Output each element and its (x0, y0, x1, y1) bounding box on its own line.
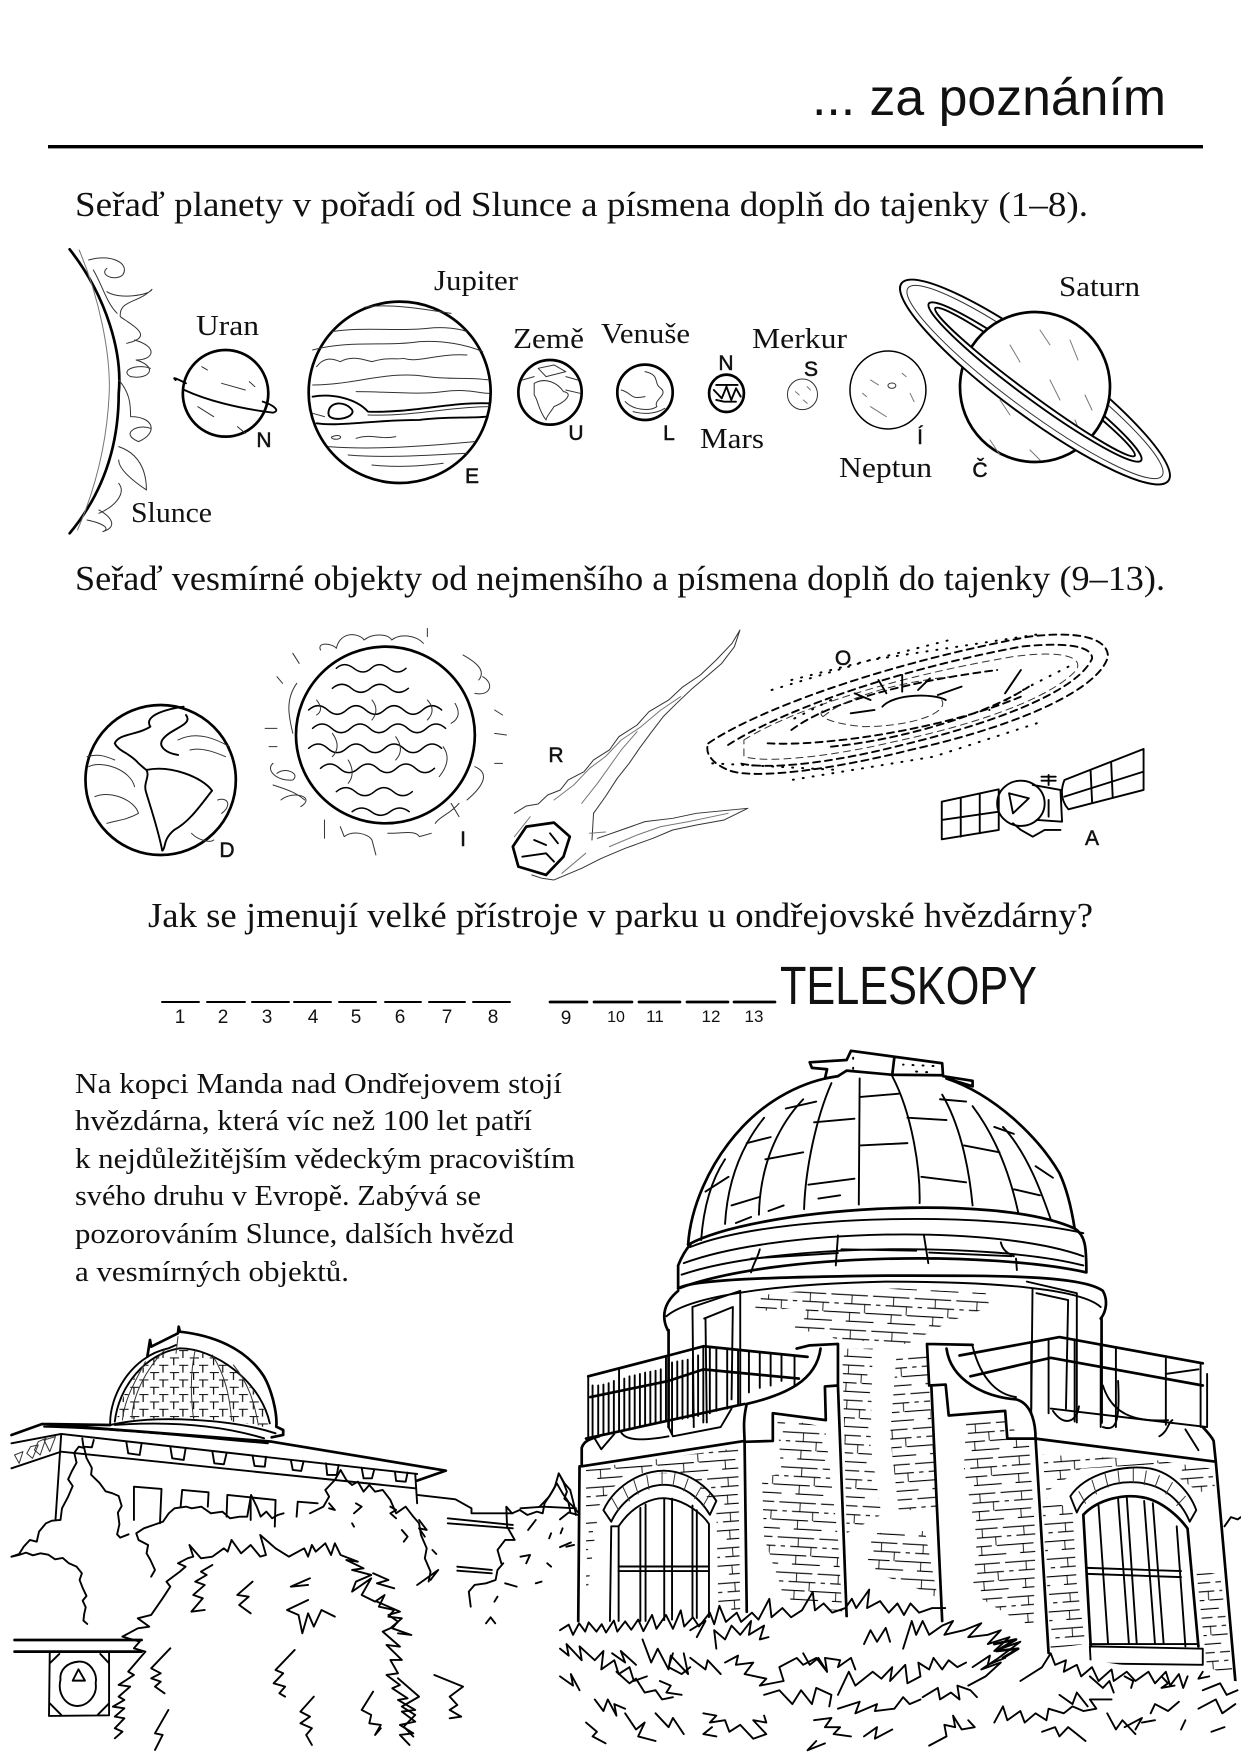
planet: Saturn with rings (881, 256, 1189, 508)
planet: Mercury (787, 379, 818, 410)
object letters (219, 647, 1099, 862)
illustration: main observatory (560, 1051, 1241, 1754)
planet and sun labels: Merkur (752, 323, 847, 355)
title rule (48, 145, 1203, 148)
wall bricks (586, 1349, 1233, 1676)
answer numbers (175, 1007, 763, 1029)
planet letters (256, 352, 988, 488)
answer numbers: 1 (175, 1007, 185, 1028)
right arched window (1070, 1467, 1203, 1665)
planet and sun labels: Uran (196, 310, 260, 342)
text block: observatory: svého druhu v Evropě. Zabývá se (75, 1181, 481, 1212)
left railing (586, 1346, 808, 1439)
answer numbers: 11 (646, 1007, 664, 1026)
planet: Jupiter (309, 302, 491, 483)
planet and sun labels: Saturn (1059, 271, 1141, 303)
answer blanks (162, 1001, 775, 1003)
handwritten answer word: TELESKOPY (780, 956, 1037, 1016)
planet letters: Č (972, 459, 988, 482)
object: satellite (942, 749, 1144, 839)
trees (11, 1447, 576, 1624)
planet and sun labels: Venuše (601, 318, 690, 350)
panel: solar system (70, 249, 1189, 533)
answer numbers: 4 (308, 1007, 319, 1028)
instruction: planets: Seřaď planety v pořadí od Slunce a písmena doplň do tajenky (1–8). (75, 185, 1088, 224)
left arched window (603, 1471, 716, 1621)
object letters: D (219, 839, 235, 862)
answer numbers: 5 (351, 1007, 361, 1028)
answer numbers: 12 (702, 1007, 720, 1026)
dome rim and cornice (664, 1208, 1106, 1330)
answer numbers: 7 (442, 1007, 452, 1028)
text block: observatory: k nejdůležitějším vědeckým pracovištím (75, 1144, 575, 1175)
object: comet (513, 630, 748, 880)
object letters: R (548, 744, 564, 767)
object: Earth (85, 705, 236, 855)
planet and sun labels: Země (513, 323, 584, 355)
title: ... za poznáním (812, 69, 1166, 127)
answer numbers: 8 (488, 1007, 498, 1028)
question: Jak se jmenují velké přístroje v parku u ondřejovské hvězdárny? (148, 896, 1093, 935)
foreground shrubs (560, 1590, 1241, 1754)
planet and sun labels: Mars (700, 423, 764, 455)
building walls (578, 1344, 1235, 1681)
object letters: O (835, 647, 851, 670)
answer numbers: 9 (561, 1008, 571, 1029)
illustration: small observatory and trees (11, 1327, 576, 1754)
drum with doors (669, 1282, 1102, 1427)
planet and sun labels (131, 265, 1141, 529)
sign on ledge (15, 1640, 142, 1716)
text block: observatory: hvězdárna, která víc než 100 let patří (75, 1106, 532, 1137)
panel: space objects (85, 628, 1144, 880)
answer numbers: 6 (395, 1007, 405, 1028)
answer numbers: 3 (262, 1007, 272, 1028)
main shrub (103, 1535, 524, 1754)
planet letters: Í (917, 426, 923, 449)
planet letters: U (568, 422, 584, 445)
planet letters: N (718, 352, 734, 375)
planet letters: N (256, 429, 272, 452)
small dome (110, 1327, 283, 1438)
planet: Mars (709, 375, 744, 412)
right railing (960, 1337, 1207, 1427)
side shrubs (560, 1476, 1241, 1547)
planet: Earth (518, 360, 582, 425)
text block: observatory (75, 1069, 575, 1288)
text block: observatory: pozorováním Slunce, dalších hvězd (75, 1219, 514, 1250)
object letters: I (460, 828, 466, 851)
sun limb with flames (70, 249, 152, 533)
text block: observatory: Na kopci Manda nad Ondřejovem stojí (75, 1069, 562, 1100)
planet letters: E (465, 465, 479, 488)
planet letters: S (804, 358, 818, 381)
dome (688, 1051, 1075, 1245)
object: Sun (265, 628, 506, 855)
planet: Neptune (850, 351, 926, 429)
planet and sun labels: Neptun (839, 452, 933, 484)
text block: observatory: a vesmírných objektů. (75, 1257, 349, 1288)
planet: Uranus (174, 350, 276, 437)
instruction: objects: Seřaď vesmírné objekty od nejmenšího a písmena doplň do tajenky (9–13). (75, 559, 1165, 598)
answer numbers: 2 (218, 1007, 228, 1028)
answer numbers: 13 (745, 1007, 763, 1026)
planet and sun labels: Slunce (131, 497, 212, 529)
planet letters: L (663, 422, 675, 445)
object letters: A (1085, 827, 1099, 850)
planet: Venus (617, 365, 673, 420)
answer numbers: 10 (607, 1009, 625, 1026)
planet and sun labels: Jupiter (434, 265, 518, 297)
object: galaxy (707, 633, 1108, 780)
roof and facade (11, 1424, 576, 1573)
